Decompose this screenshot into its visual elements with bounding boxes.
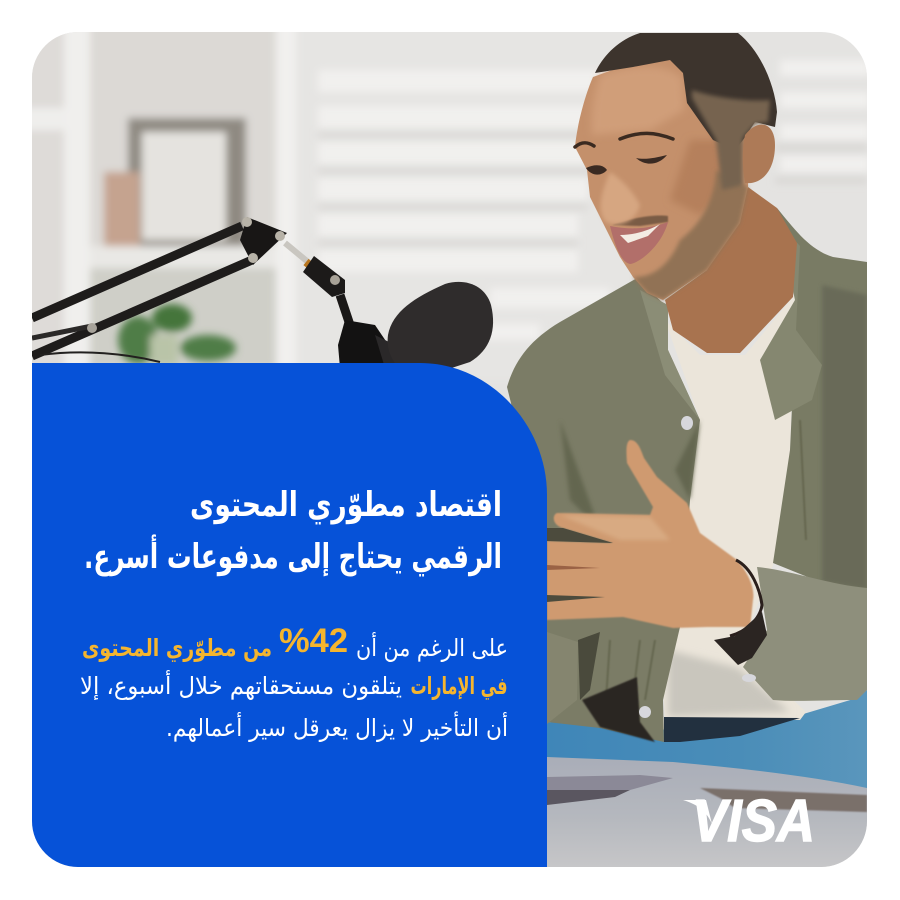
person: olive shirt (507, 208, 867, 742)
shirt buttons (639, 416, 756, 718)
shirt shadow near belt (578, 632, 600, 700)
body line three: أن التأخير لا يزال يعرقل سير أعمالهم. (166, 711, 508, 742)
highlight: content creators: من مطوّري المحتوى (82, 634, 272, 662)
eyebrows (575, 133, 673, 147)
blurred plant (118, 304, 236, 365)
body text (80, 622, 508, 742)
hair fade (692, 90, 770, 190)
dark shirt shadow (582, 677, 655, 742)
forehead highlight (592, 67, 684, 135)
blue panel (32, 363, 547, 867)
blurred room background (32, 32, 867, 730)
mouth (610, 222, 668, 264)
table (547, 757, 867, 867)
moustache (612, 215, 668, 226)
eyes (586, 155, 667, 175)
cheek shadow (672, 140, 719, 213)
visa logo: VISA (692, 788, 815, 854)
dark cuff (714, 612, 767, 665)
person: belt shadow (664, 717, 800, 742)
bracelet (730, 560, 762, 636)
person: hand (547, 440, 767, 665)
nose (601, 172, 640, 224)
laptop on table (547, 775, 673, 805)
person: t-shirt (770, 714, 805, 720)
highlight: in the UAE: في الإمارات (410, 672, 508, 700)
heading: الرقمي يحتاج إلى مدفوعات أسرع. (84, 534, 502, 577)
microphone boom arm (32, 217, 400, 368)
shirt collar and placket (760, 243, 822, 420)
shirt wrinkles (606, 420, 806, 720)
face (575, 60, 750, 300)
heading: اقتصاد مطوّري المحتوى (190, 485, 502, 525)
microphone foam (388, 282, 493, 375)
body text: على الرغم من أن (356, 632, 508, 662)
hair (595, 33, 777, 150)
person: neck (665, 187, 797, 353)
right shirt panel (773, 208, 867, 590)
person: t-shirt lower shadow (668, 650, 790, 717)
beard (633, 170, 748, 300)
second device on table (700, 788, 867, 812)
gap between fingers (547, 528, 613, 602)
crumpled shirt fold (547, 632, 578, 724)
right shirt shadow (822, 285, 867, 590)
person: head (575, 33, 777, 300)
heading (84, 485, 502, 577)
highlight: 42 percent: %42 (279, 622, 348, 660)
palm highlight (560, 515, 670, 540)
ear (743, 125, 775, 183)
sleeve (743, 567, 867, 701)
body line two: يتلقون مستحقاتهم خلال أسبوع، إلا (80, 670, 402, 701)
window blinds (318, 60, 870, 340)
person: jeans (547, 690, 867, 790)
left shirt panel (507, 278, 700, 742)
